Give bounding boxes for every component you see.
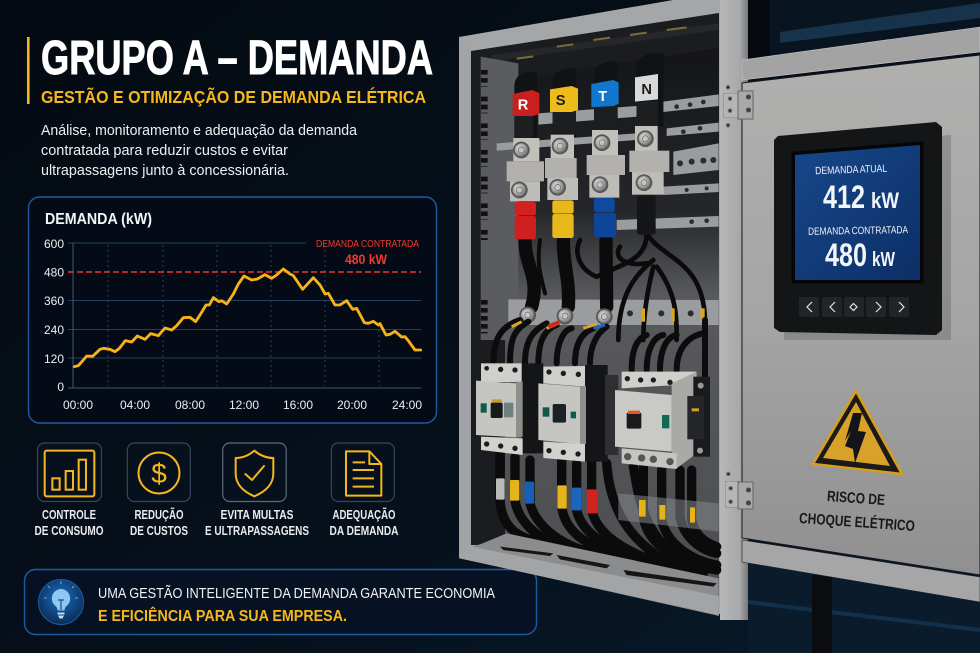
x axis labels: 04:00 [120, 398, 150, 412]
busbar T: T [598, 89, 607, 105]
x axis labels: 16:00 [283, 398, 313, 412]
label: consumption control: DE CONSUMO [34, 524, 104, 538]
contracted demand line [68, 271, 421, 273]
breaker 2 [538, 365, 608, 462]
breaker 3 [605, 372, 710, 469]
label: document: DA DEMANDA [330, 524, 398, 538]
description: Análise, monitoramento e adequação da demanda [41, 122, 358, 139]
door hinges [738, 91, 753, 509]
cabinet frame [459, 0, 748, 620]
demand meter: 480 [825, 237, 867, 273]
label: consumption control [34, 508, 104, 538]
label: document [330, 507, 398, 538]
left wall [481, 57, 518, 340]
y axis labels [44, 237, 64, 394]
busbar S [545, 68, 578, 238]
label: document: ADEQUAÇÃO [332, 507, 396, 522]
lower interior: breakers [459, 320, 750, 615]
y axis labels: 240 [44, 323, 64, 337]
callout banner: E EFICIÊNCIA PARA SUA EMPRESA. [98, 607, 347, 625]
label: consumption control: CONTROLE [42, 508, 96, 522]
wall behind cabinet [748, 0, 980, 653]
DIN rails [497, 94, 719, 325]
panel: cabinet door [738, 27, 980, 602]
door body [742, 55, 980, 575]
y axis labels: 600 [44, 237, 64, 251]
door top strip [742, 27, 980, 80]
x axis labels [63, 398, 422, 412]
title accent bar [27, 37, 30, 104]
bottom lip [459, 547, 719, 615]
icon: document [331, 443, 394, 502]
busbar R: R [518, 97, 529, 113]
demand meter: DEMANDA ATUAL [815, 163, 887, 177]
y axis labels: 360 [44, 294, 64, 308]
cables to lower rail [525, 233, 705, 340]
title: GRUPO A – DEMANDA [41, 32, 433, 85]
panel: open electrical cabinet [459, 0, 750, 620]
label: shield [205, 508, 309, 538]
label: cost reduction: DE CUSTOS [130, 524, 188, 538]
label: shield: E ULTRAPASSAGENS [205, 524, 309, 538]
grid [68, 243, 421, 388]
subtitle: GESTÃO E OTIMIZAÇÃO DE DEMANDA ELÉTRICA [41, 86, 426, 107]
demand meter: kW [872, 249, 895, 271]
x axis labels: 12:00 [229, 398, 259, 412]
lower cables [500, 453, 717, 573]
icon: light bulb [38, 580, 84, 624]
busbar N [629, 53, 669, 235]
label: cost reduction: REDUÇÃO [134, 507, 184, 522]
description: ultrapassagens junto à concessionária. [41, 162, 289, 179]
warning text [799, 488, 916, 535]
rail bolts [519, 307, 536, 323]
chart title: DEMANDA (kW) [45, 211, 152, 228]
demand meter [774, 122, 951, 340]
warning text: RISCO DE [826, 488, 885, 509]
demand meter: kW [871, 188, 899, 213]
description [41, 122, 358, 179]
door bottom strip [742, 540, 980, 602]
y axis labels: 480 [44, 266, 64, 280]
x axis labels: 20:00 [337, 398, 367, 412]
top cables [493, 320, 705, 377]
busbar S: S [556, 93, 566, 109]
busbar T [587, 62, 625, 237]
cable sleeves [496, 478, 505, 500]
contracted demand label: 480 kW [345, 252, 387, 267]
top vent [492, 23, 718, 62]
callout text: UMA GESTÃO INTELIGENTE DA DEMANDA GARANTE ECONOMIA [98, 585, 495, 602]
icon: cost reduction [127, 443, 190, 502]
contracted demand label: DEMANDA CONTRATADA [316, 238, 419, 250]
warning text: CHOQUE ELÉTRICO [799, 510, 916, 535]
label: shield: EVITA MULTAS [220, 508, 294, 522]
upper interior: busbars [481, 23, 750, 340]
lower hinge on frame [725, 481, 739, 507]
y axis labels: 120 [44, 352, 64, 366]
label: cost reduction [130, 507, 188, 538]
x axis labels: 08:00 [175, 398, 205, 412]
meter screen [795, 145, 920, 280]
description: contratada para reduzir custos e evitar [41, 142, 288, 159]
busbar R [507, 72, 544, 239]
rail behind lower cables [618, 493, 719, 532]
callout banner [24, 570, 536, 634]
cabinet interior [471, 13, 719, 596]
icon: consumption control [38, 443, 102, 502]
demand meter: 412 [823, 179, 865, 215]
panel: demand chart [28, 197, 436, 423]
breaker 1 [476, 363, 543, 455]
cabinet floor [472, 533, 719, 596]
busbar N: N [641, 82, 652, 98]
door hinge on frame [723, 93, 740, 117]
demand curve [74, 269, 421, 367]
x axis labels: 00:00 [63, 398, 93, 412]
x axis labels: 24:00 [392, 398, 422, 412]
demand meter: DEMANDA CONTRATADA [808, 224, 908, 238]
y axis labels: 0 [57, 380, 64, 394]
contracted demand label [316, 238, 419, 267]
icon: shield [223, 443, 286, 502]
icon: cost reduction: $ [151, 458, 167, 489]
icon: high voltage warning [813, 391, 902, 474]
meter buttons [799, 297, 909, 317]
